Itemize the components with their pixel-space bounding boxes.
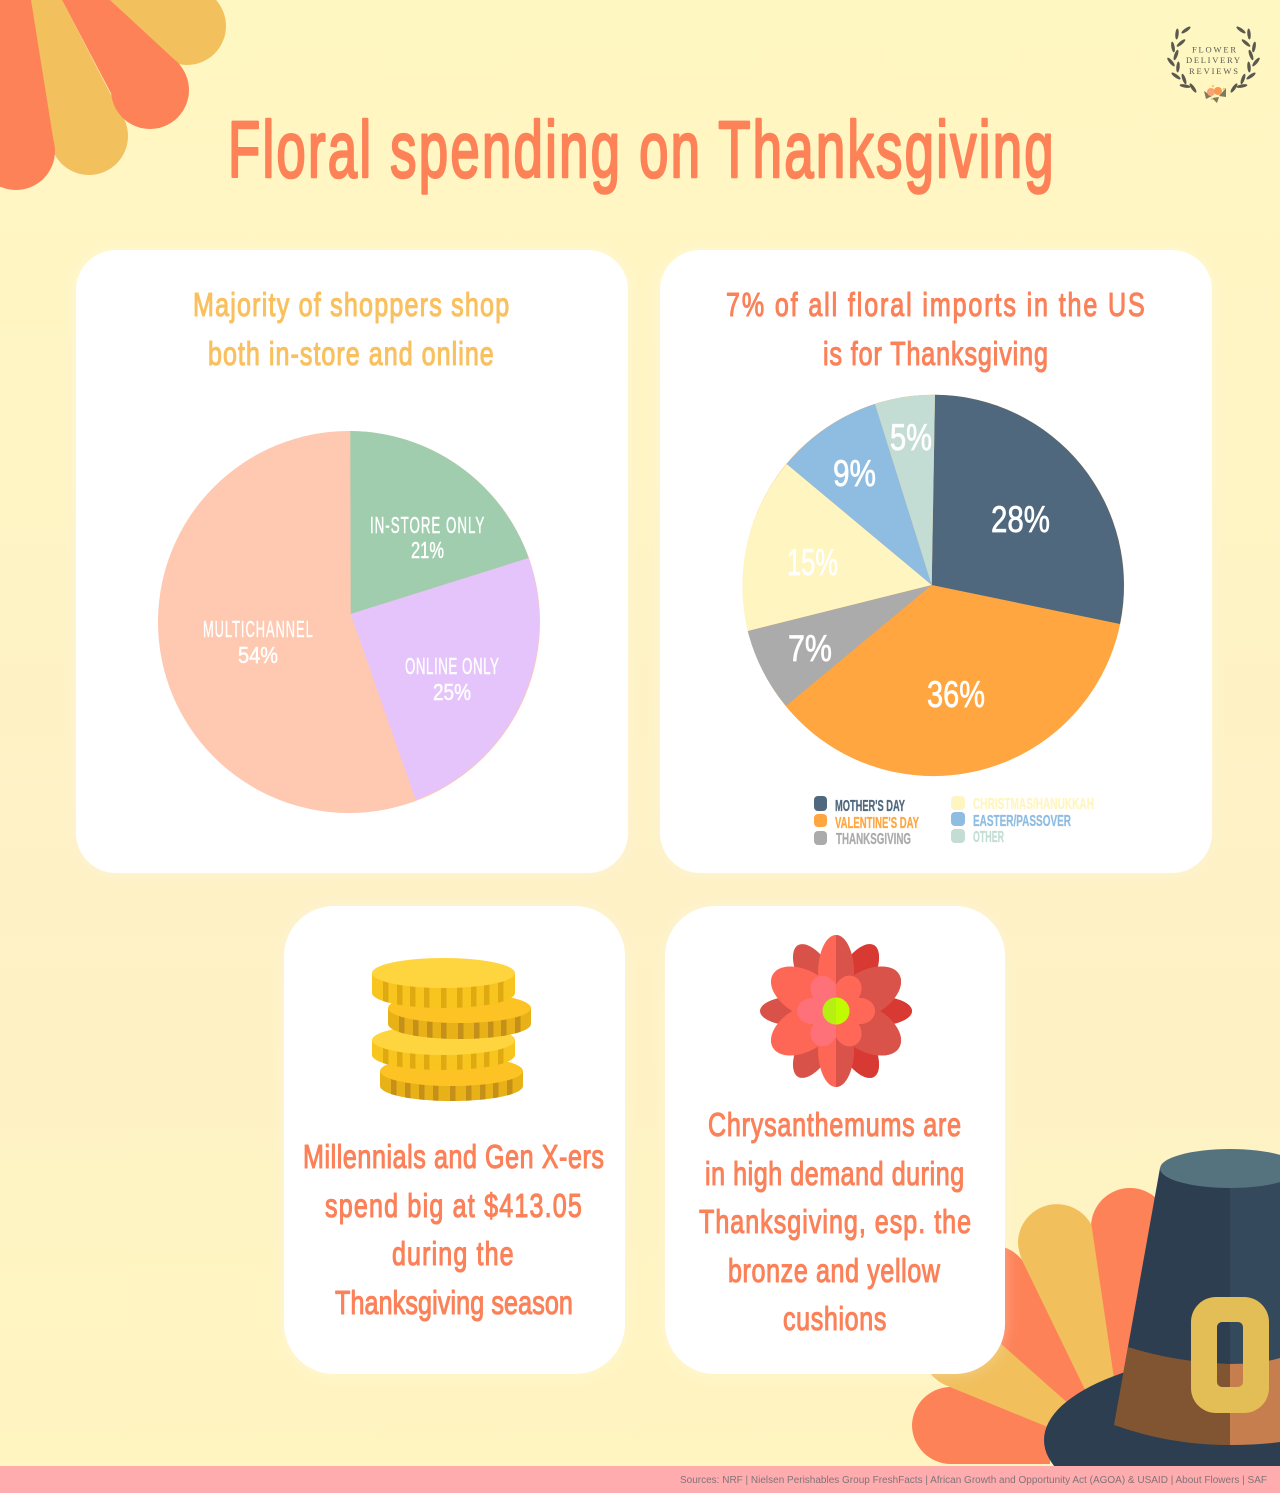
text: spending fact: during the [392, 1236, 514, 1273]
coin 1 [372, 958, 515, 1010]
text: spending fact [303, 1139, 604, 1322]
decoration: turkey with pilgrim hat [912, 1149, 1280, 1493]
text: spending fact: spend big at $413.05 [325, 1188, 582, 1225]
footer: sources [0, 1466, 1280, 1493]
pilgrim hat [1044, 1149, 1280, 1493]
pie labels: 9% [833, 453, 876, 494]
coin 3 [372, 1029, 515, 1070]
pie labels: MULTICHANNEL [203, 616, 313, 642]
buckle [1191, 1297, 1269, 1413]
legend: CHRISTMAS/HANUKKAH [973, 796, 1094, 813]
pie labels: 25% [433, 679, 471, 705]
icon: chrysanthemum [760, 935, 912, 1087]
pie labels: IN-STORE ONLY [370, 512, 485, 538]
pie labels: 36% [927, 674, 985, 715]
text: chrysanthemum fact: Chrysanthemums are [708, 1107, 961, 1144]
text: chrysanthemum fact: bronze and yellow [728, 1253, 941, 1290]
icon: bouquet [1204, 85, 1226, 103]
panel: floral imports [660, 250, 1212, 873]
coin 2 [388, 998, 531, 1039]
icon: laurel wreath [1166, 25, 1261, 93]
pie labels: 21% [411, 537, 444, 563]
pie labels: ONLINE ONLY [405, 653, 499, 679]
legend: VALENTINE'S DAY [835, 815, 919, 832]
text: chrysanthemum fact: cushions [783, 1301, 886, 1338]
legend: EASTER/PASSOVER [973, 813, 1071, 830]
heading: imports: 7% of all floral imports in the US [726, 287, 1145, 324]
heading: shoppers: both in-store and online [208, 336, 494, 373]
pie chart: shopping channels [158, 431, 540, 813]
text: spending fact: Millennials and Gen X-ers [303, 1139, 604, 1176]
heading: imports: is for Thanksgiving [823, 336, 1048, 373]
pie labels: 28% [991, 499, 1050, 540]
legend: MOTHER'S DAY [835, 798, 905, 815]
text: spending fact: Thanksgiving season [335, 1285, 573, 1322]
logo text: REVIEWS [1189, 66, 1238, 76]
heading: shoppers [193, 287, 509, 373]
coin 4 [380, 1062, 523, 1101]
footer: sources: Sources: NRF | Nielsen Perishables Group FreshFacts | African Growth and Opportunity Act (AGOA) & USAID | About Flowers | SAF [680, 1475, 1267, 1486]
panel: shopping channels [76, 250, 628, 873]
panel: spending fact [284, 906, 625, 1374]
pie chart: floral imports by holiday [742, 395, 1124, 776]
decoration: top-left feathers [0, 0, 226, 190]
pie labels: 5% [890, 417, 932, 458]
pie labels [787, 417, 1050, 715]
legend: THANKSGIVING [836, 831, 911, 848]
logo: Flower Delivery Reviews [1166, 25, 1261, 103]
pie labels: 7% [788, 628, 832, 669]
logo text: DELIVERY [1186, 55, 1240, 65]
legend: OTHER [973, 829, 1004, 846]
text: chrysanthemum fact [699, 1107, 971, 1338]
turkey feathers [912, 1188, 1169, 1464]
logo text: FLOWER [1192, 44, 1236, 54]
legend [814, 796, 1094, 848]
pie labels: 54% [238, 642, 278, 668]
pie labels [203, 512, 499, 705]
logo text [1186, 44, 1240, 76]
icon: coin stack [372, 958, 531, 1105]
text: chrysanthemum fact: in high demand during [705, 1156, 964, 1193]
text: chrysanthemum fact: Thanksgiving, esp. the [699, 1204, 971, 1241]
title: Floral spending on Thanksgiving [228, 106, 1054, 195]
pie labels: 15% [787, 542, 838, 583]
heading: imports [726, 287, 1145, 373]
panel: chrysanthemum fact [665, 906, 1005, 1374]
heading: shoppers: Majority of shoppers shop [193, 287, 509, 324]
